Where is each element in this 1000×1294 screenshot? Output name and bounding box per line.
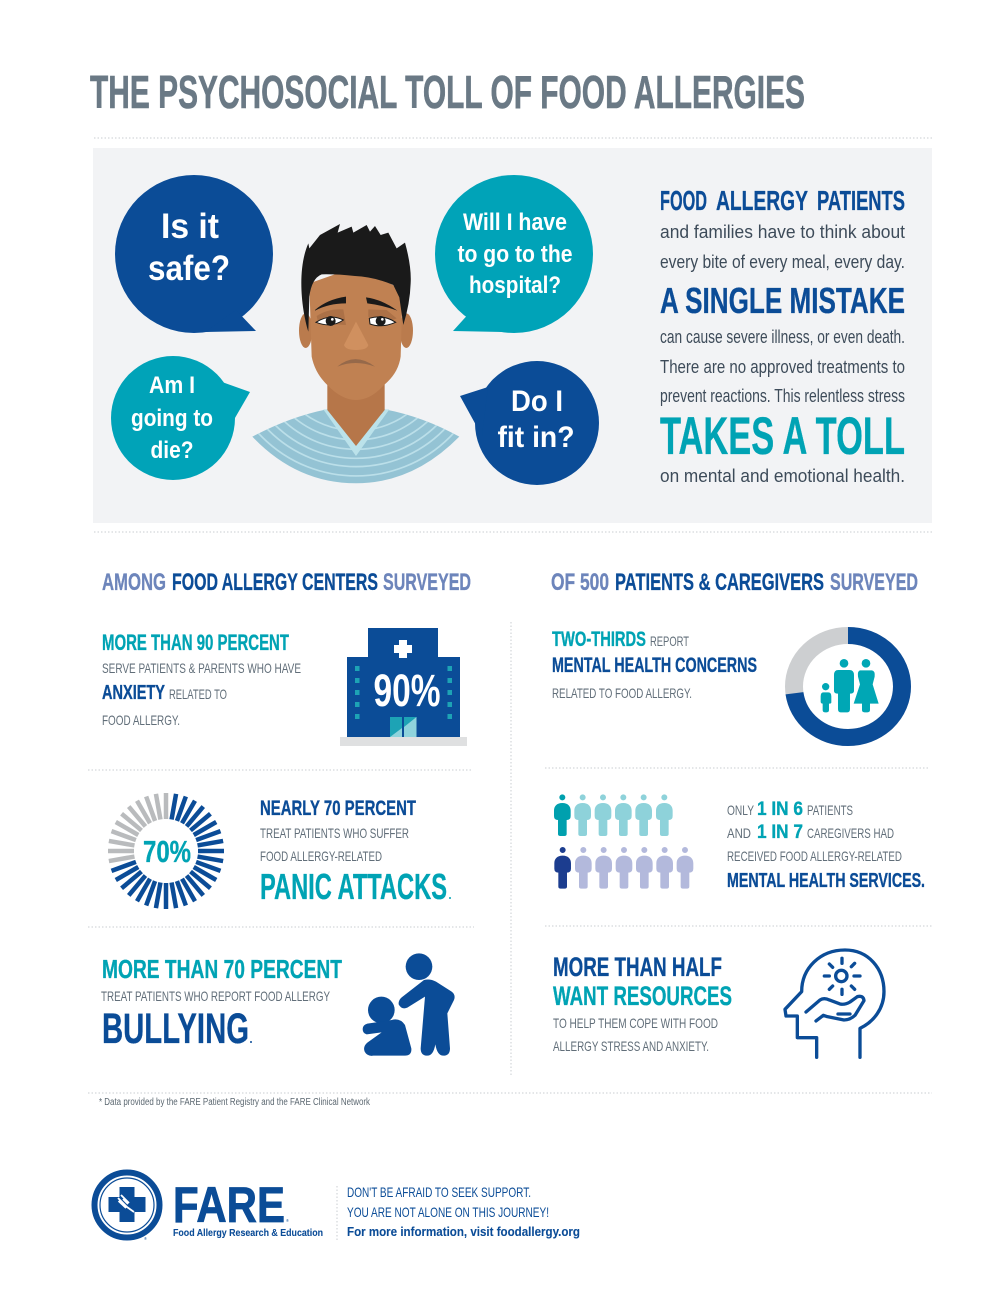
stat: one in six patients, one in seven caregivers: RECEIVED FOOD ALLERGY-RELATED (727, 848, 902, 864)
speech bubble: am I going to die: Am I (149, 372, 195, 399)
stat: more than half want resources: ALLERGY STRESS AND ANXIETY. (553, 1038, 709, 1054)
stat: more than 70 percent: TREAT PATIENTS WHO REPORT FOOD ALLERGY (101, 988, 330, 1004)
text block: food allergy patients: prevent reactions. This relentless stress (660, 386, 905, 406)
text block: food allergy patients: PATIENTS (817, 185, 905, 216)
text block: food allergy patients: A SINGLE MISTAKE (660, 280, 905, 321)
logo: FARE: Food Allergy Research & Education (173, 1227, 323, 1239)
speech bubble: is it safe: Is it (161, 207, 219, 246)
text block: food allergy patients: There are no approved treatments to (660, 357, 905, 377)
text block: food allergy patients: can cause severe illness, or even death. (660, 327, 905, 347)
stat: nearly 70 percent: PANIC ATTACKS (260, 866, 447, 907)
text block: food allergy patients: FOOD (660, 185, 707, 216)
stat: one in six patients, one in seven caregivers (727, 799, 925, 892)
speech bubble: do I fit in: Do I (511, 385, 563, 418)
stat: one in six patients, one in seven caregivers: MENTAL HEALTH SERVICES. (727, 870, 925, 892)
chart: two-thirds donut with family (794, 635, 902, 738)
heading: among food allergy centers surveyed: SURVEYED (383, 569, 471, 596)
heading: among food allergy centers surveyed: AMONG (102, 569, 166, 596)
stat: two-thirds: TWO-THIRDS (552, 628, 646, 651)
text block: food allergy patients: and families have to think about (660, 222, 905, 242)
icon: FARE cross emblem (94, 1172, 160, 1238)
stat: nearly 70 percent: NEARLY 70 PERCENT (260, 797, 416, 820)
icon: hospital with 90%: 90% (374, 665, 440, 716)
heading: of 500 patients and caregivers surveyed: OF 500 (551, 569, 609, 596)
stat: one in six patients, one in seven caregivers: PATIENTS (807, 802, 853, 818)
text block: food allergy patients: every bite of every meal, every day. (660, 252, 905, 272)
speech bubble: is it safe: safe? (148, 249, 230, 288)
stat: two-thirds: REPORT (650, 633, 689, 649)
closing message: DON'T BE AFRAID TO SEEK SUPPORT. (347, 1184, 531, 1200)
speech bubble: am I going to die: die? (150, 437, 194, 464)
stat: two-thirds (552, 628, 757, 701)
stat: more than 90 percent: MORE THAN 90 PERCENT (102, 630, 289, 655)
speech bubble: do I fit in (460, 361, 599, 485)
text block: food allergy patients (660, 185, 905, 486)
heading: of 500 patients and caregivers surveyed: SURVEYED (830, 569, 918, 596)
speech bubble: am I going to die: going to (131, 405, 213, 432)
chart: 70% radial gauge: 70% (143, 834, 191, 869)
stat: one in six patients, one in seven caregivers: 1 IN 6 (757, 799, 803, 820)
speech bubble: is it safe (115, 175, 273, 333)
stat: nearly 70 percent: TREAT PATIENTS WHO SUFFER (260, 825, 409, 841)
closing message (347, 1184, 580, 1239)
logo: FARE (94, 1172, 323, 1241)
heading: of 500 patients and caregivers surveyed: PATIENTS & CAREGIVERS (615, 569, 824, 596)
stat: one in six patients, one in seven caregivers: ONLY (727, 802, 754, 818)
heading: among food allergy centers surveyed: FOOD ALLERGY CENTERS (172, 569, 378, 596)
stat: nearly 70 percent: FOOD ALLERGY-RELATED (260, 848, 382, 864)
stat: more than half want resources: MORE THAN HALF (553, 952, 722, 982)
stat: more than 70 percent: BULLYING (102, 1005, 249, 1053)
stat: more than 90 percent: RELATED TO (169, 686, 227, 702)
stat: more than 90 percent: ANXIETY (102, 682, 165, 704)
icon: one in six and one in seven people (554, 794, 693, 889)
stat: one in six patients, one in seven caregivers: 1 IN 7 (757, 822, 803, 843)
text block: food allergy patients: ALLERGY (716, 185, 808, 216)
icon: person comforting a sitting person (363, 953, 455, 1056)
speech bubble: hospital: Will I have (463, 209, 567, 236)
stat: more than 70 percent: MORE THAN 70 PERCENT (102, 954, 342, 984)
logo: FARE: FARE (173, 1177, 285, 1233)
speech bubble: hospital (435, 175, 593, 333)
speech bubble: am I going to die (111, 356, 250, 480)
stat: two-thirds: MENTAL HEALTH CONCERNS (552, 654, 757, 677)
logo: FARE: ® (286, 1218, 289, 1223)
logo: FARE: ® (144, 1236, 147, 1241)
stat: nearly 70 percent (260, 797, 451, 907)
panel: hero (93, 148, 932, 523)
icon: hospital with 90% (340, 628, 467, 746)
stat: more than half want resources (553, 952, 732, 1054)
closing message: YOU ARE NOT ALONE ON THIS JOURNEY! (347, 1204, 549, 1220)
stat: one in six patients, one in seven caregivers: CAREGIVERS HAD (807, 825, 894, 841)
footnote: * Data provided by the FARE Patient Registry and the FARE Clinical Network (99, 1097, 371, 1108)
chart: 70% radial gauge (108, 793, 224, 909)
speech bubble: do I fit in: fit in? (498, 421, 574, 454)
icon: worried person (223, 211, 489, 483)
stat: more than half want resources: TO HELP THEM COPE WITH FOOD (553, 1015, 718, 1031)
speech bubble: hospital: to go to the (458, 241, 572, 268)
stat: more than 90 percent: SERVE PATIENTS & PARENTS WHO HAVE (102, 660, 301, 676)
closing message: For more information, visit foodallergy.org (347, 1224, 580, 1239)
icon: family (821, 659, 879, 712)
stat: more than half want resources: WANT RESOURCES (553, 981, 732, 1011)
stat: more than 90 percent (102, 630, 301, 728)
icon: head with hand and sun (785, 950, 884, 1057)
speech bubble: hospital: hospital? (469, 272, 561, 299)
stat: two-thirds: RELATED TO FOOD ALLERGY. (552, 685, 692, 701)
stat: more than 70 percent (101, 954, 342, 1053)
stat: one in six patients, one in seven caregivers: AND (727, 825, 751, 841)
text block: food allergy patients: on mental and emotional health. (660, 466, 905, 486)
stat: more than 90 percent: FOOD ALLERGY. (102, 712, 180, 728)
